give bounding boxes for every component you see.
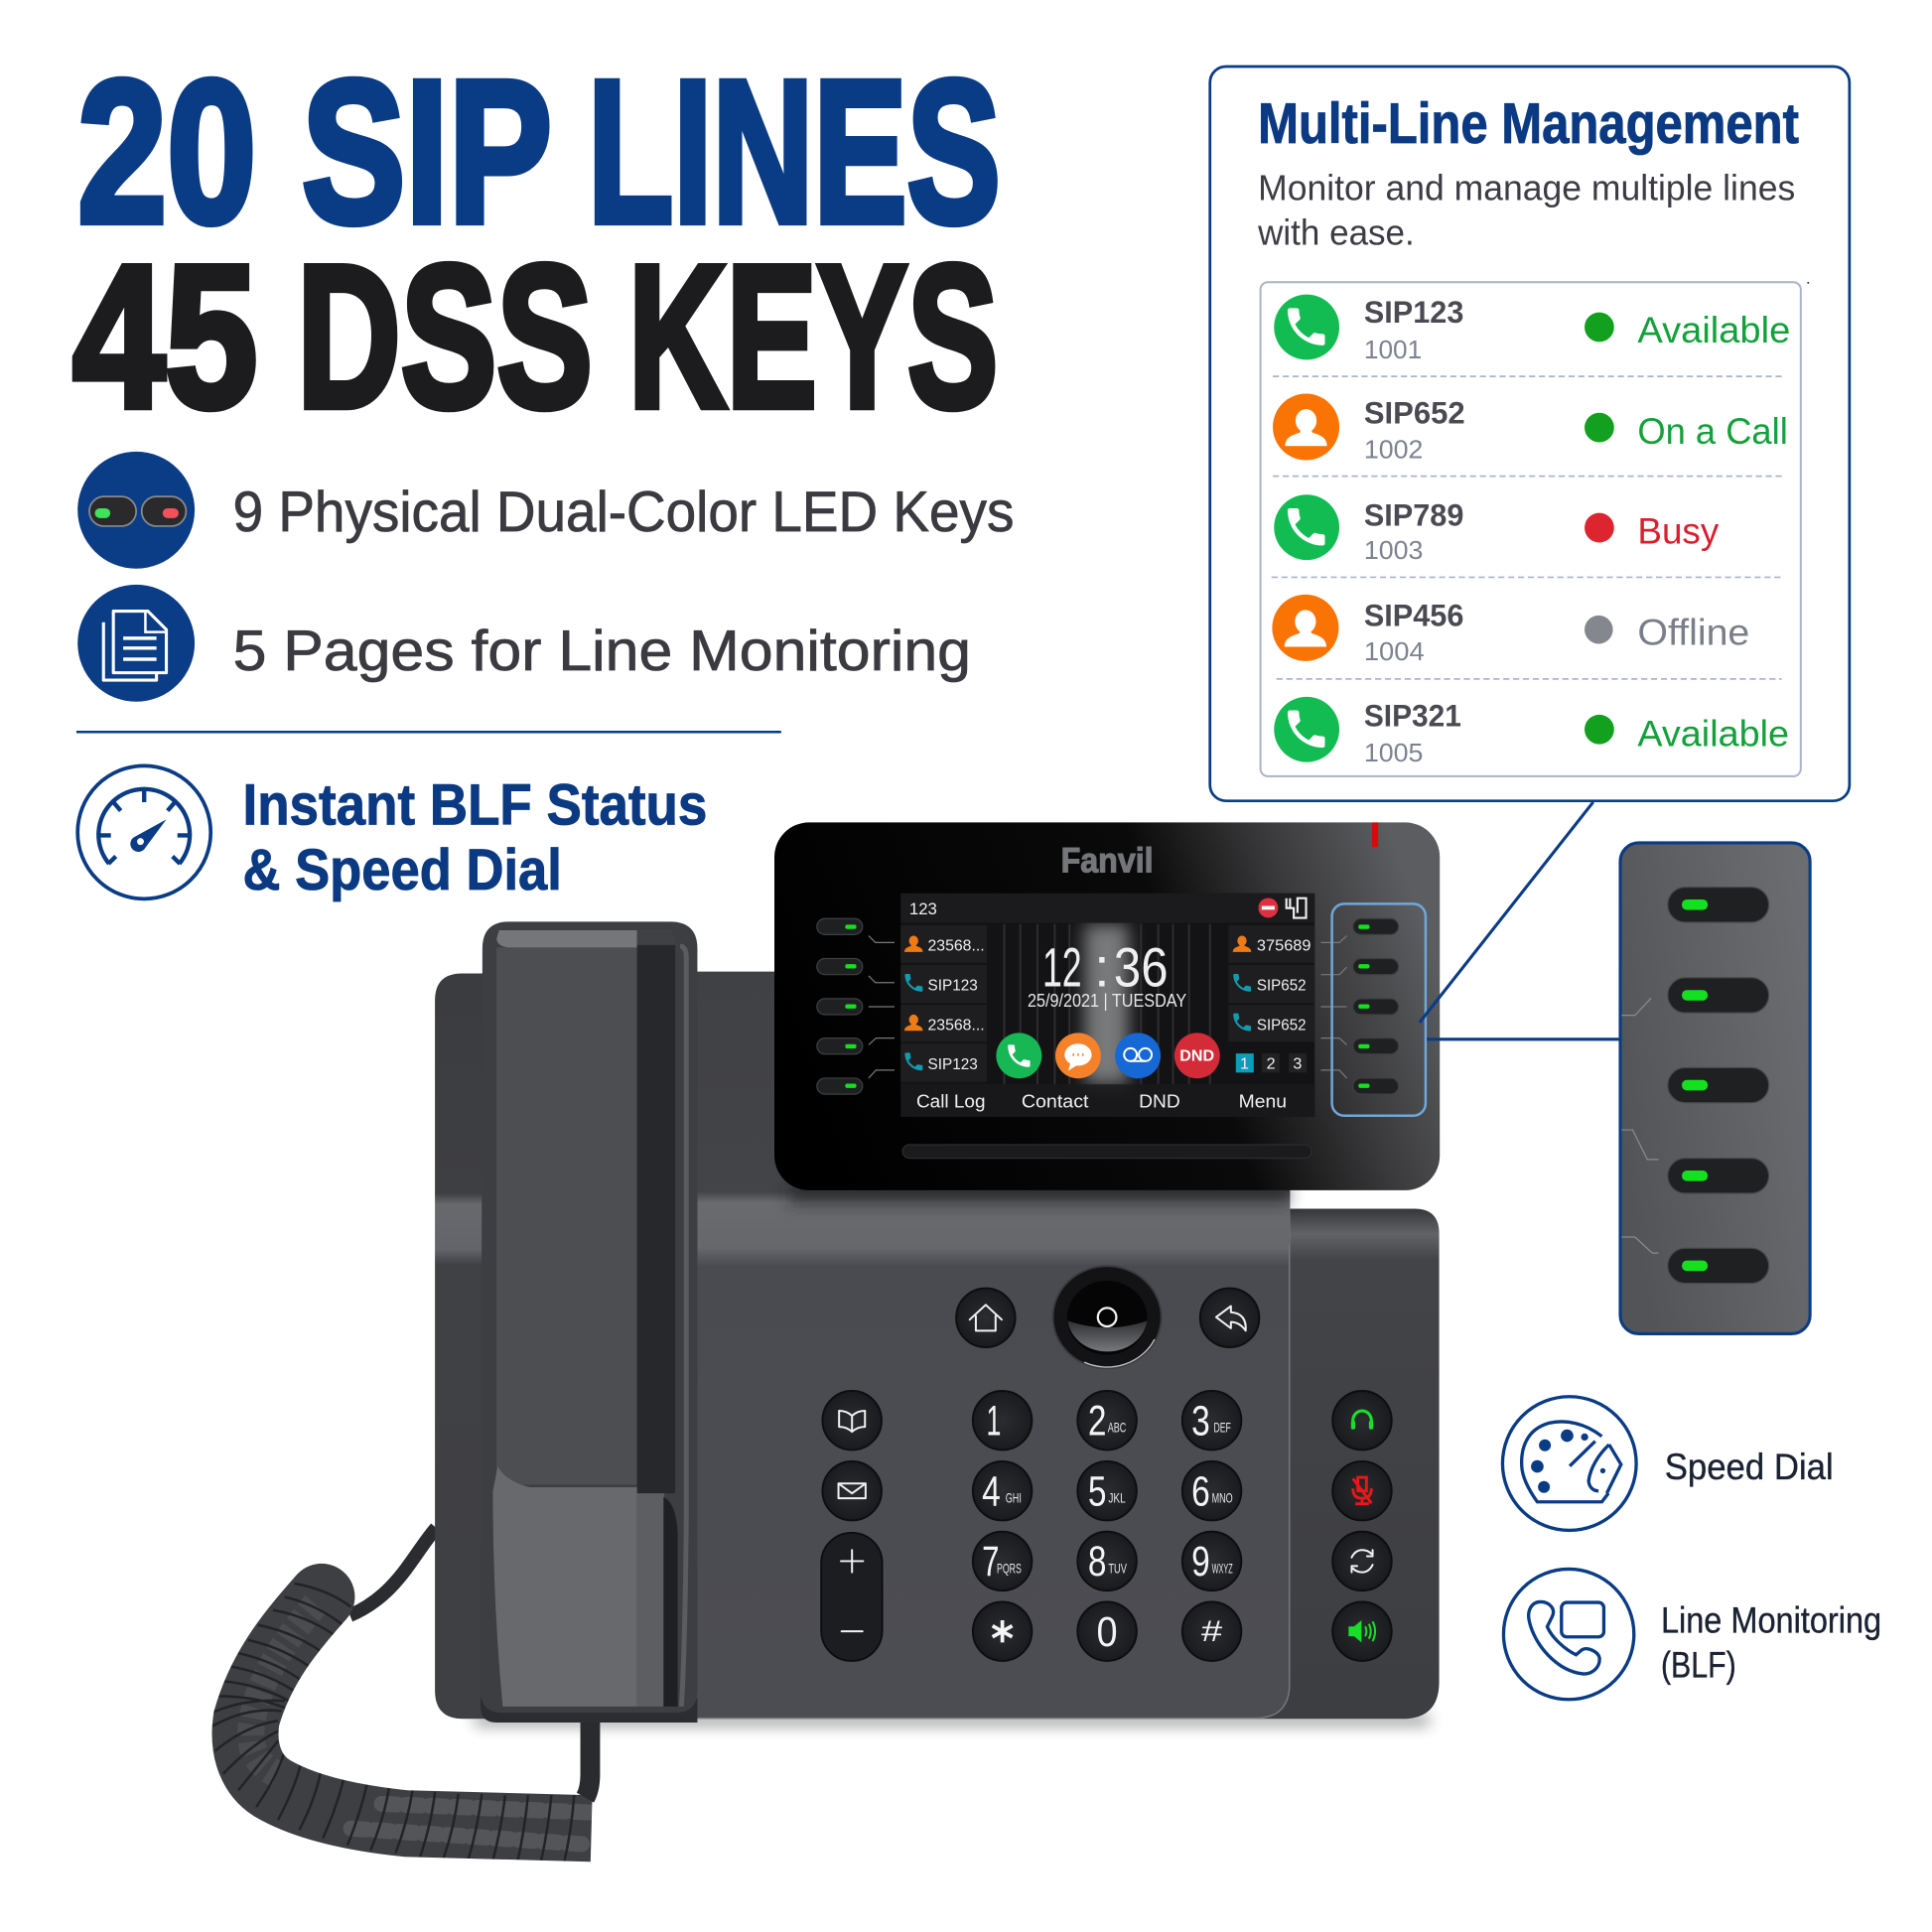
soft keys: DND bbox=[1139, 1091, 1180, 1112]
right contact tiles: 375689 bbox=[1257, 937, 1311, 955]
soft keys: Call Log bbox=[916, 1091, 985, 1112]
icon: dual-color LED keys bbox=[77, 452, 195, 569]
panel: multi-line management bbox=[1210, 67, 1850, 801]
soft keys bbox=[900, 1084, 1314, 1117]
row: SIP456: SIP456 bbox=[1364, 598, 1463, 632]
right line keys with highlight bbox=[1320, 903, 1426, 1116]
row: SIP652: On a Call bbox=[1637, 410, 1788, 452]
date: 25/9/2021 | TUESDAY bbox=[1028, 990, 1186, 1011]
connector lines to callout bbox=[1420, 802, 1620, 1039]
icon: speedometer gauge bbox=[77, 765, 210, 898]
navigation cluster bbox=[956, 1266, 1259, 1368]
left contact tiles bbox=[900, 925, 987, 1082]
status list box bbox=[1261, 282, 1809, 776]
button: headset bbox=[1332, 1391, 1392, 1449]
row: SIP123: Available bbox=[1637, 309, 1790, 350]
panel description: Monitor and manage multiple lines bbox=[1258, 168, 1795, 208]
row: SIP456 bbox=[1272, 595, 1749, 666]
row: SIP789: SIP789 bbox=[1364, 497, 1463, 532]
left line keys bbox=[817, 918, 895, 1094]
key hash bbox=[1182, 1601, 1241, 1661]
right contact tiles: SIP652 bbox=[1257, 1016, 1307, 1034]
label: line monitoring BLF bbox=[1661, 1598, 1881, 1686]
body: right section bbox=[1257, 1208, 1440, 1719]
left contact tiles: 23568... bbox=[928, 1016, 985, 1034]
key 8: TUV bbox=[1108, 1561, 1127, 1577]
title: 20 SIP lines: SIP bbox=[302, 39, 552, 265]
text: 5 pages: 5 Pages for Line Monitoring bbox=[233, 620, 971, 683]
button: directory bbox=[822, 1391, 882, 1449]
icon: speed dial bbox=[1502, 1397, 1636, 1530]
key 9: WXYZ bbox=[1212, 1561, 1233, 1577]
top status bar bbox=[900, 894, 1314, 923]
button: speaker bbox=[1332, 1601, 1392, 1661]
title: 45 DSS keys: KEYS bbox=[628, 224, 998, 451]
key 3: 3 bbox=[1191, 1397, 1210, 1444]
heading: instant BLF status and speed dial bbox=[242, 772, 707, 902]
key 4: 4 bbox=[982, 1467, 1001, 1514]
app shortcut icons: DND bbox=[1179, 1048, 1214, 1065]
key 6: 6 bbox=[1191, 1467, 1210, 1514]
clock: : bbox=[1094, 935, 1110, 998]
app shortcut icons bbox=[996, 1033, 1220, 1078]
key 5 bbox=[1077, 1461, 1137, 1520]
left contact tiles: 23568... bbox=[928, 937, 985, 955]
row: SIP321: Available bbox=[1637, 712, 1789, 754]
key 1: 1 bbox=[986, 1397, 1001, 1444]
row: SIP456: Offline bbox=[1637, 612, 1749, 653]
key star bbox=[973, 1601, 1032, 1661]
row: SIP652 bbox=[1273, 394, 1788, 465]
title: 20 SIP lines: 20 bbox=[77, 39, 256, 265]
cord: handset to coil link bbox=[586, 1713, 590, 1798]
phone body bbox=[435, 921, 1440, 1723]
key 3: DEF bbox=[1213, 1421, 1231, 1437]
row: SIP321: 1005 bbox=[1364, 738, 1423, 767]
phone shadow bbox=[475, 1716, 1430, 1725]
button: transfer bbox=[1332, 1532, 1392, 1590]
row: SIP789 bbox=[1274, 494, 1720, 565]
button: mute bbox=[1332, 1461, 1392, 1520]
label: speed dial: Speed Dial bbox=[1665, 1446, 1834, 1487]
title: 45 DSS keys: DSS bbox=[297, 224, 593, 451]
page tabs: 3 bbox=[1293, 1055, 1302, 1073]
icon: line monitoring bbox=[1503, 1569, 1634, 1700]
page tabs: 1 bbox=[1240, 1055, 1249, 1073]
body: main keypad deck bbox=[690, 972, 1290, 1719]
key 4 bbox=[973, 1461, 1032, 1520]
key 5: JKL bbox=[1108, 1491, 1126, 1507]
right contact tiles bbox=[1228, 925, 1314, 1041]
dial pad bbox=[973, 1391, 1241, 1661]
key 9: 9 bbox=[1191, 1538, 1210, 1585]
key 7: 7 bbox=[982, 1538, 1000, 1585]
key 5: 5 bbox=[1088, 1467, 1106, 1514]
page tabs bbox=[1236, 1053, 1307, 1073]
key 0: 0 bbox=[1097, 1608, 1118, 1655]
panel description: with ease. bbox=[1257, 211, 1415, 252]
top status bar: 123 bbox=[909, 899, 937, 918]
row: SIP123: 1001 bbox=[1364, 335, 1422, 364]
row: SIP123: SIP123 bbox=[1364, 295, 1463, 330]
clock: 12 bbox=[1042, 935, 1082, 998]
row: SIP652: 1002 bbox=[1364, 435, 1423, 465]
key 2: 2 bbox=[1088, 1397, 1106, 1444]
clock: 36 bbox=[1114, 935, 1169, 998]
row: SIP789: 1003 bbox=[1364, 535, 1423, 565]
key 8 bbox=[1077, 1532, 1137, 1590]
cord: thin line to coil bbox=[349, 1528, 436, 1615]
cord: coiled handset cable bbox=[212, 1563, 592, 1863]
panel description bbox=[1257, 168, 1795, 252]
key 6: MNO bbox=[1212, 1491, 1233, 1507]
key 0 bbox=[1077, 1601, 1137, 1661]
key 8: 8 bbox=[1088, 1538, 1106, 1585]
panel heading: Multi-Line Management bbox=[1258, 92, 1799, 156]
screen housing bbox=[774, 822, 1440, 1190]
label: line monitoring BLF: (BLF) bbox=[1661, 1644, 1736, 1686]
body: back plate bbox=[435, 973, 486, 1719]
heading: instant BLF status and speed dial: & Speed Dial bbox=[242, 838, 562, 902]
key 9 bbox=[1182, 1532, 1241, 1590]
LCD screen bbox=[900, 894, 1314, 1117]
title: 45 DSS keys: 45 bbox=[72, 224, 257, 451]
label: line monitoring BLF: Line Monitoring bbox=[1661, 1598, 1881, 1640]
soft keys: Contact bbox=[1022, 1091, 1089, 1112]
row: SIP652: SIP652 bbox=[1364, 396, 1465, 431]
title: 20 SIP lines: LINES bbox=[588, 39, 1001, 265]
red indicator bbox=[1372, 822, 1378, 847]
row: SIP456: 1004 bbox=[1364, 636, 1425, 666]
function keys left bbox=[821, 1391, 883, 1661]
button: back bbox=[1200, 1289, 1259, 1347]
bottom slot bbox=[902, 1145, 1311, 1159]
key 7: PQRS bbox=[997, 1561, 1022, 1577]
key 4: GHI bbox=[1006, 1491, 1022, 1507]
text: 9 physical keys: 9 Physical Dual-Color LED Keys bbox=[233, 481, 1014, 544]
key 6 bbox=[1182, 1461, 1241, 1520]
callout: enlarged line keys bbox=[1620, 843, 1810, 1333]
soft keys: Menu bbox=[1239, 1091, 1287, 1112]
logo: Fanvil: Fanvil bbox=[1061, 842, 1154, 881]
navigation ball bbox=[1052, 1266, 1162, 1368]
icon: pages bbox=[77, 585, 195, 702]
row: SIP789: Busy bbox=[1637, 509, 1720, 551]
key 2: ABC bbox=[1108, 1421, 1126, 1437]
handset bbox=[481, 921, 697, 1723]
screen shadow on deck bbox=[788, 1185, 1290, 1205]
key 3 bbox=[1182, 1391, 1241, 1449]
row: SIP123 bbox=[1274, 295, 1790, 364]
heading: instant BLF status and speed dial: Instant BLF Status bbox=[242, 772, 707, 837]
function keys right bbox=[1332, 1391, 1392, 1661]
key 1 bbox=[973, 1391, 1032, 1449]
page tabs: 2 bbox=[1267, 1055, 1276, 1073]
button: message bbox=[822, 1461, 882, 1520]
left contact tiles: SIP123 bbox=[928, 977, 978, 995]
key 7 bbox=[973, 1532, 1032, 1590]
button: volume bbox=[821, 1533, 883, 1661]
left contact tiles: SIP123 bbox=[928, 1055, 978, 1073]
key hash: # bbox=[1201, 1615, 1223, 1648]
row: SIP321: SIP321 bbox=[1364, 698, 1461, 733]
button: home bbox=[956, 1289, 1016, 1347]
right contact tiles: SIP652 bbox=[1257, 977, 1307, 995]
row: SIP321 bbox=[1274, 697, 1789, 767]
key 2 bbox=[1077, 1391, 1137, 1449]
